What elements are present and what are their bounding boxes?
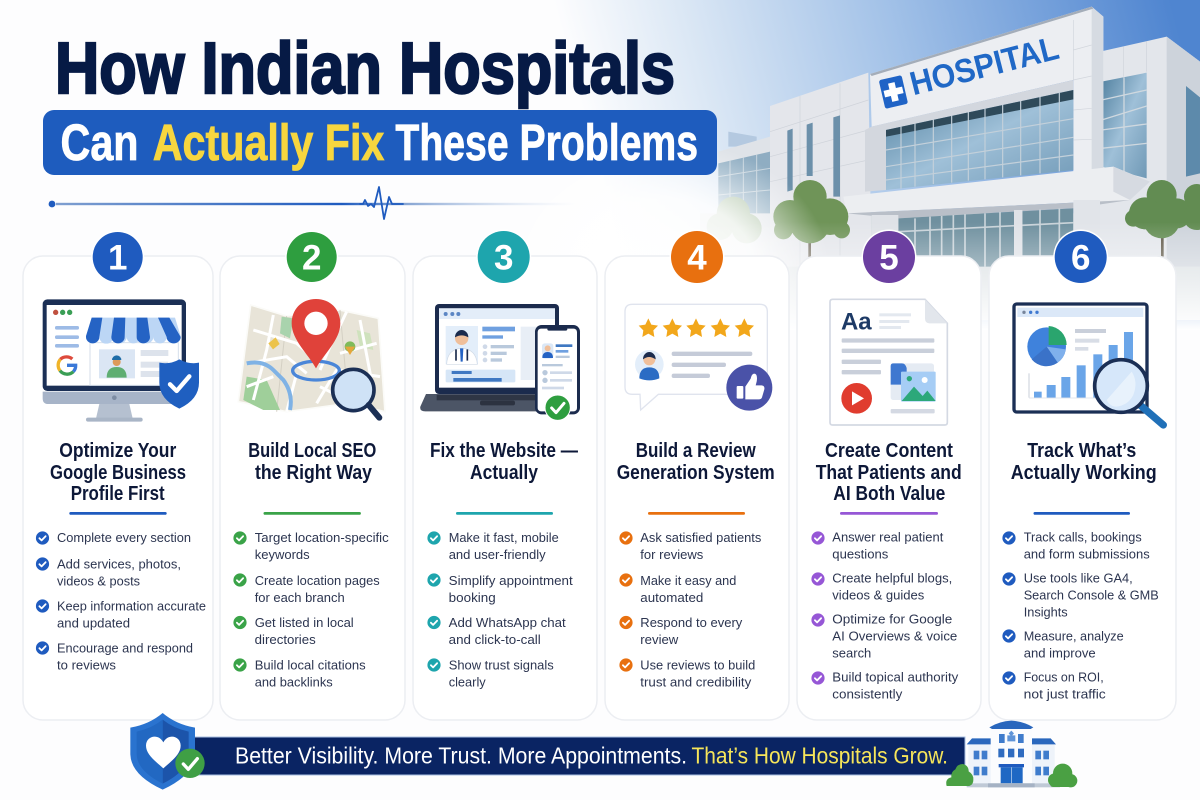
checklist: to reviews <box>57 658 116 672</box>
checklist <box>811 530 959 702</box>
footer banner: Better Visibility. More Trust. More Appointments. <box>235 742 687 768</box>
heading underline <box>648 512 745 515</box>
number badge 2: 2 <box>302 238 321 278</box>
panel: step 6 <box>989 230 1176 720</box>
heading: Actually Working <box>1011 462 1157 484</box>
checklist: Respond to every <box>640 615 743 630</box>
heading <box>816 440 962 505</box>
checklist: Complete every section <box>57 530 191 545</box>
checklist: Use tools like GA4, <box>1024 570 1133 586</box>
checklist: Encourage and respond <box>57 640 193 656</box>
checklist: not just traffic <box>1024 686 1106 702</box>
number badge 3: 3 <box>494 238 513 278</box>
icon: local map with pin and magnifier <box>238 299 385 418</box>
icon: laptop and phone website <box>420 304 580 420</box>
icon: small hospital building with bushes <box>946 721 1077 787</box>
heading underline <box>264 512 361 515</box>
number badge 4 <box>670 230 724 284</box>
panel: step 2 <box>220 230 405 720</box>
checklist: Track calls, bookings <box>1024 530 1142 544</box>
heading underline <box>840 512 938 515</box>
number badge 1: 1 <box>108 238 127 278</box>
heading: Actually <box>470 462 539 484</box>
panel: step 1 <box>23 230 213 720</box>
photo bottom fade <box>540 222 1200 330</box>
checklist: Answer real patient <box>832 530 944 544</box>
number badge 3 <box>476 230 531 284</box>
heartbeat divider <box>49 187 576 219</box>
checklist: Use reviews to build <box>640 658 755 672</box>
checklist: Build local citations <box>255 658 366 672</box>
heading <box>617 440 775 484</box>
checklist <box>619 530 762 690</box>
heading: Build Local SEO <box>248 440 376 462</box>
checklist: Get listed in local <box>255 615 354 630</box>
checklist: videos & guides <box>832 588 925 602</box>
checklist: Add WhatsApp chat <box>449 615 566 630</box>
title: How Indian Hospitals <box>55 29 675 109</box>
checklist: Target location-specific <box>255 530 389 545</box>
footer banner <box>190 737 965 775</box>
checklist: Simplify appointment <box>449 573 573 588</box>
checklist <box>233 530 389 690</box>
checklist: Focus on ROI, <box>1024 670 1104 684</box>
checklist: Search Console & GMB <box>1024 588 1159 602</box>
sky backdrop <box>530 0 1200 330</box>
checklist: Optimize for Google <box>832 612 952 626</box>
checklist: Measure, analyze <box>1024 628 1124 644</box>
checklist: consistently <box>832 686 903 702</box>
heading <box>50 440 186 505</box>
heading: Create Content <box>825 440 953 462</box>
heading: That Patients and <box>816 462 962 484</box>
heading underline <box>69 512 167 515</box>
checklist: videos & posts <box>57 574 140 588</box>
checklist <box>36 530 206 672</box>
icon: analytics dashboard with magnifier <box>1014 304 1163 425</box>
checklist: keywords <box>255 547 310 562</box>
number badge 4: 4 <box>687 238 707 278</box>
heading <box>1011 440 1157 484</box>
checklist: questions <box>832 546 889 562</box>
checklist: booking <box>449 590 496 605</box>
subtitle banner: Can <box>60 114 138 171</box>
heading: Track What’s <box>1027 440 1136 462</box>
checklist: Insights <box>1024 604 1068 620</box>
checklist: clearly <box>449 674 486 690</box>
number badge 6: 6 <box>1071 238 1090 278</box>
checklist: for reviews <box>640 547 704 562</box>
heading: AI Both Value <box>833 483 945 505</box>
footer banner: That’s How Hospitals Grow. <box>692 742 948 768</box>
subtitle banner <box>43 110 717 175</box>
heading <box>430 440 578 484</box>
sign: HOSPITAL: HOSPITAL <box>906 30 1063 103</box>
number badge 5: 5 <box>879 238 899 278</box>
icon: google business listing on monitor <box>43 299 199 422</box>
checklist: Add services, photos, <box>57 556 181 572</box>
checklist: and backlinks <box>255 674 333 690</box>
checklist: and click-to-call <box>449 632 541 647</box>
panel: step 4 <box>605 230 789 720</box>
checklist: Create location pages <box>255 573 380 588</box>
icon: content document: Aa <box>841 308 872 335</box>
heading: Generation System <box>617 462 775 484</box>
checklist: automated <box>640 590 703 605</box>
heading: Google Business <box>50 462 186 484</box>
trees <box>707 180 1200 260</box>
icon: review speech bubble with stars <box>625 304 772 411</box>
number badge 6 <box>1053 230 1108 284</box>
checklist: Ask satisfied patients <box>640 530 762 545</box>
photo left fade <box>500 140 830 400</box>
checklist: Keep information accurate <box>57 598 206 614</box>
icon: shield with heart and check <box>130 713 205 790</box>
checklist: search <box>832 646 871 660</box>
checklist: Create helpful blogs, <box>832 570 952 586</box>
checklist: Make it fast, mobile <box>449 530 559 545</box>
heading: Optimize Your <box>59 440 176 462</box>
heading: the Right Way <box>255 462 373 484</box>
checklist: Show trust signals <box>449 658 554 672</box>
checklist: Make it easy and <box>640 573 736 588</box>
hospital building photo <box>700 7 1200 320</box>
checklist: directories <box>255 632 316 647</box>
checklist: review <box>640 632 679 647</box>
heading: Fix the Website — <box>430 440 578 462</box>
heading: Profile First <box>71 483 165 505</box>
panel: step 5 <box>797 230 981 720</box>
checklist: trust and credibility <box>640 674 752 690</box>
checklist: AI Overviews & voice <box>832 628 957 644</box>
checklist: and improve <box>1024 646 1096 660</box>
subtitle banner: These Problems <box>395 114 698 171</box>
heading underline <box>1034 512 1130 515</box>
checklist <box>1002 530 1159 702</box>
checklist: Build topical authority <box>832 670 959 684</box>
checklist <box>427 530 573 690</box>
panel: step 3 <box>413 230 597 720</box>
checklist: and user-friendly <box>449 547 546 562</box>
number badge 2 <box>285 230 338 284</box>
checklist: for each branch <box>255 590 345 605</box>
icon: content document <box>830 299 947 425</box>
number badge 1 <box>91 230 144 284</box>
heading underline <box>456 512 553 515</box>
heading <box>248 440 376 484</box>
subtitle banner: Actually Fix <box>153 114 384 171</box>
number badge 5 <box>862 230 916 284</box>
heading: Build a Review <box>636 440 756 462</box>
checklist: and updated <box>57 616 130 630</box>
checklist: and form submissions <box>1024 546 1150 562</box>
